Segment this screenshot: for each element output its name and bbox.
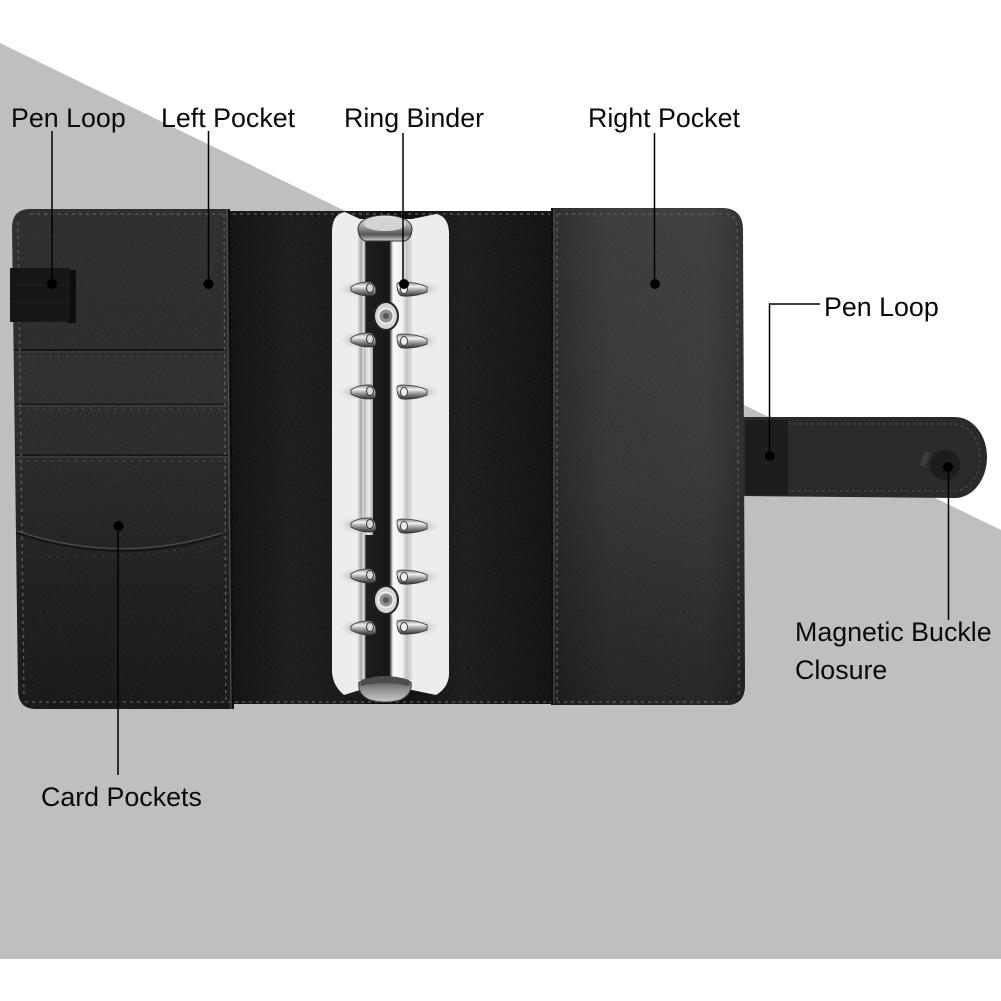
callout: pen loop (left): Pen Loop xyxy=(11,103,126,133)
callout: magnetic buckle closure xyxy=(795,462,992,685)
bottom cap xyxy=(359,676,411,702)
callout: card pockets: Card Pockets xyxy=(41,782,202,812)
callout: right pocket: Right Pocket xyxy=(588,103,740,133)
top cap xyxy=(358,215,412,241)
callout: pen loop (left) xyxy=(11,103,126,289)
callout: ring binder xyxy=(344,103,484,289)
callout: pen loop (strap): Pen Loop xyxy=(824,292,939,322)
middle lining right xyxy=(385,211,553,704)
middle lining left xyxy=(228,211,386,704)
leather grain xyxy=(12,209,745,709)
closure strap xyxy=(742,417,987,498)
callout: magnetic buckle closure: Closure xyxy=(795,655,887,685)
ring binder xyxy=(332,212,449,702)
left panel xyxy=(12,209,233,709)
callout: pen loop (strap) xyxy=(765,292,939,461)
callout: right pocket xyxy=(588,103,740,289)
seams xyxy=(227,208,554,709)
strap pen loop xyxy=(745,420,788,495)
rings and rivets xyxy=(337,280,441,637)
callout: left pocket xyxy=(161,103,296,289)
stitching xyxy=(18,214,739,702)
wallet: open binder with pockets and closure strap xyxy=(10,208,987,709)
callout: card pockets xyxy=(41,521,202,812)
left pen loop xyxy=(10,268,76,323)
right panel xyxy=(552,208,745,705)
callout: magnetic buckle closure: Magnetic Buckle xyxy=(795,617,992,647)
magnetic button xyxy=(930,450,960,480)
white lining xyxy=(332,212,449,695)
metal spine xyxy=(358,232,412,680)
callout: ring binder: Ring Binder xyxy=(344,103,484,133)
callout: left pocket: Left Pocket xyxy=(161,103,296,133)
card pocket folds xyxy=(14,350,228,557)
